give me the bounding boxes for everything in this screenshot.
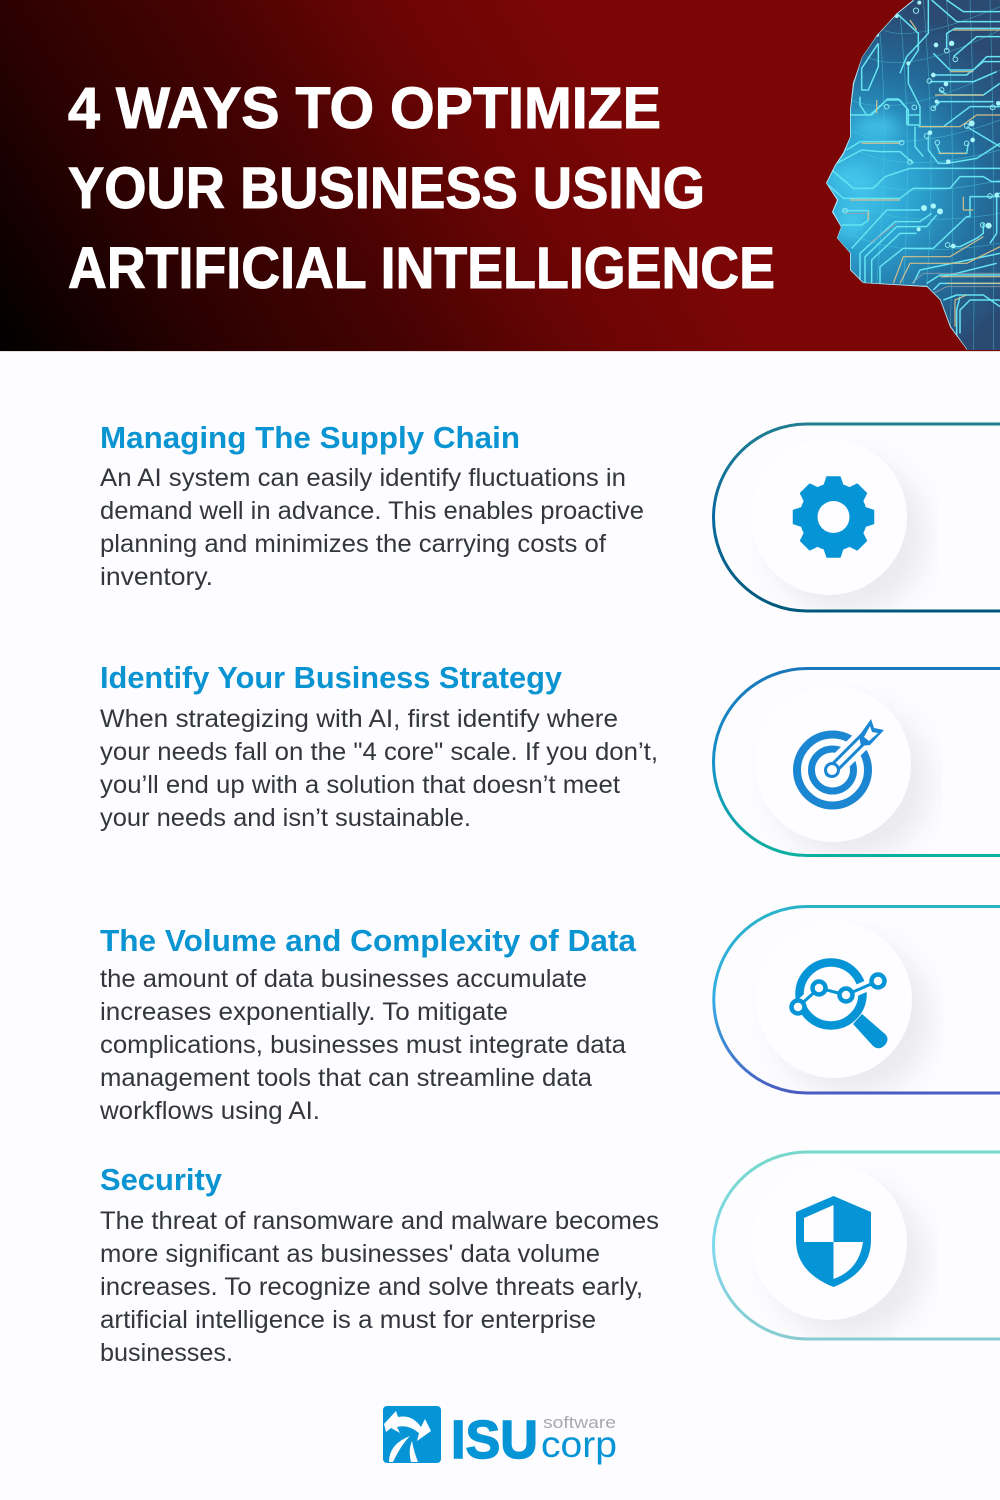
title: YOUR BUSINESS USING	[68, 156, 705, 221]
section: identify your business strategy	[100, 660, 658, 832]
pill: data search	[714, 906, 1000, 1097]
icon: gear	[794, 477, 874, 557]
heading: the volume and complexity of data: The Volume and Complexity of Data	[100, 923, 637, 958]
heading: managing the supply chain: Managing The Supply Chain	[100, 420, 520, 455]
body text: security: artificial intelligence is a must for enterprise	[100, 1306, 596, 1334]
body text: strategy: When strategizing with AI, first identify where	[100, 705, 618, 733]
heading: security: Security	[100, 1162, 223, 1197]
body text: security: increases. To recognize and solve threats early,	[100, 1273, 643, 1301]
body text: supply chain: planning and minimizes the carrying costs of	[100, 530, 606, 558]
body text: security	[100, 1207, 659, 1367]
logo: ISU software corp	[383, 1406, 617, 1470]
logo wordmark ISU: ISU	[451, 1410, 538, 1470]
logo word software: software	[543, 1413, 616, 1432]
pill: target	[714, 668, 1000, 861]
body text: security: more significant as businesses' data volume	[100, 1240, 600, 1268]
title	[68, 76, 775, 301]
body text: data: management tools that can streamline data	[100, 1064, 592, 1092]
pill: gear	[714, 424, 1000, 614]
title: 4 WAYS TO OPTIMIZE	[68, 76, 661, 141]
body text: supply chain: inventory.	[100, 563, 213, 591]
icon: circuit-board AI head	[820, 0, 1000, 351]
body text: data	[99, 965, 626, 1125]
icon: shield	[796, 1196, 871, 1287]
body text: data: workflows using AI.	[99, 1097, 320, 1125]
section: the volume and complexity of data	[99, 923, 637, 1125]
body text: supply chain	[100, 464, 644, 591]
logo mark	[383, 1406, 441, 1463]
icon: target with arrow	[797, 719, 884, 806]
body text: data: increases exponentially. To mitigate	[100, 998, 508, 1026]
pill: shield	[714, 1152, 1000, 1339]
body text: data: complications, businesses must integrate data	[100, 1031, 626, 1059]
body text: strategy	[100, 705, 658, 832]
body text: data: the amount of data businesses accumulate	[100, 965, 587, 993]
body text: supply chain: demand well in advance. This enables proactive	[100, 497, 644, 525]
body text: strategy: your needs and isn’t sustainable.	[100, 804, 471, 832]
section: managing the supply chain	[100, 420, 644, 591]
logo word corp: corp	[541, 1424, 617, 1465]
body text: supply chain: An AI system can easily identify fluctuations in	[100, 464, 626, 492]
icon: magnifier with line chart	[792, 962, 888, 1048]
title: ARTIFICIAL INTELLIGENCE	[68, 236, 775, 301]
body text: strategy: your needs fall on the "4 core" scale. If you don’t,	[100, 738, 658, 766]
body text: security: businesses.	[100, 1339, 233, 1367]
heading: identify your business strategy: Identify Your Business Strategy	[100, 660, 563, 695]
section: security	[100, 1162, 659, 1367]
header banner	[0, 0, 1000, 352]
body text: strategy: you’ll end up with a solution that doesn’t meet	[100, 771, 620, 799]
body text: security: The threat of ransomware and malware becomes	[100, 1207, 659, 1235]
